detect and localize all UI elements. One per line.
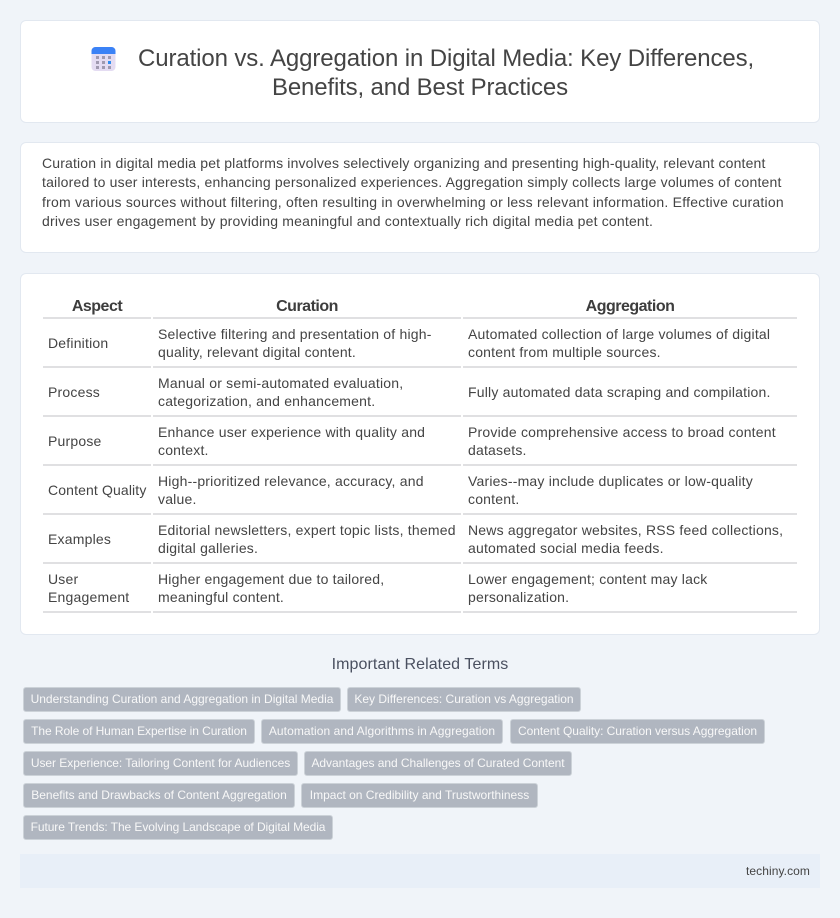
row: examples: automated social media feeds. bbox=[468, 540, 664, 556]
row: process: Fully automated data scraping and compilation. bbox=[468, 384, 771, 400]
intro text bbox=[42, 155, 784, 229]
row: definition bbox=[48, 326, 770, 360]
row: user engagement bbox=[48, 571, 708, 605]
title: Curation vs. Aggregation in Digital Media: Key Differences, bbox=[138, 45, 754, 72]
row: content quality: Varies--may include duplicates or low-quality bbox=[468, 473, 753, 489]
table header: Aggregation bbox=[586, 298, 674, 315]
row: purpose: context. bbox=[158, 442, 209, 458]
row: definition: Selective filtering and presentation of high- bbox=[158, 326, 432, 342]
row: purpose: Enhance user experience with quality and bbox=[158, 424, 425, 440]
title bbox=[138, 45, 754, 101]
related terms tags: Future Trends: The Evolving Landscape of Digital Media bbox=[31, 820, 325, 834]
related terms heading: Important Related Terms bbox=[332, 656, 508, 673]
header panel bbox=[20, 20, 820, 123]
title: Benefits, and Best Practices bbox=[272, 74, 568, 101]
related terms tags: Impact on Credibility and Trustworthiness bbox=[310, 788, 529, 802]
row: user engagement: User bbox=[48, 571, 78, 587]
footer bbox=[20, 854, 820, 888]
row: user engagement: Engagement bbox=[48, 589, 129, 605]
related terms tags: Understanding Curation and Aggregation in Digital Media bbox=[31, 692, 333, 706]
row: user engagement: meaningful content. bbox=[158, 589, 284, 605]
row: content quality: value. bbox=[158, 491, 197, 507]
row: examples: Editorial newsletters, expert topic lists, themed bbox=[158, 522, 456, 538]
row: examples: Examples bbox=[48, 531, 111, 547]
row: process: Manual or semi-automated evaluation, bbox=[158, 375, 403, 391]
row: definition: quality, relevant digital content. bbox=[158, 344, 356, 360]
row: process: categorization, and enhancement. bbox=[158, 393, 375, 409]
table header bbox=[72, 298, 674, 315]
footer credit: techiny.com bbox=[746, 864, 810, 878]
table header: Aspect bbox=[72, 298, 122, 315]
row: definition: Automated collection of large volumes of digital bbox=[468, 326, 770, 342]
row: purpose: Purpose bbox=[48, 433, 102, 449]
row: purpose bbox=[48, 424, 776, 458]
related terms tags: Benefits and Drawbacks of Content Aggregation bbox=[31, 788, 287, 802]
row: examples: digital galleries. bbox=[158, 540, 258, 556]
intro text: drives user engagement by providing meaningful and contextually rich digital media pet content. bbox=[42, 213, 653, 229]
intro panel bbox=[20, 142, 820, 253]
row: examples bbox=[48, 522, 783, 556]
related terms tags: User Experience: Tailoring Content for Audiences bbox=[31, 756, 290, 770]
row: definition: Definition bbox=[48, 335, 108, 351]
row: process: Process bbox=[48, 384, 100, 400]
icon: calendar bbox=[92, 47, 116, 71]
row: examples: News aggregator websites, RSS feed collections, bbox=[468, 522, 783, 538]
intro text: from various sources without filtering, often resulting in overwhelming or less relevant information. Effective curation bbox=[42, 194, 784, 210]
related terms tags bbox=[23, 687, 765, 840]
row: user engagement: Higher engagement due to tailored, bbox=[158, 571, 384, 587]
row: purpose: datasets. bbox=[468, 442, 527, 458]
related terms tags: The Role of Human Expertise in Curation bbox=[31, 724, 247, 738]
intro text: Curation in digital media pet platforms involves selectively organizing and presenting high-quality, relevant content bbox=[42, 155, 766, 171]
row: content quality bbox=[48, 473, 753, 507]
related terms tags: Automation and Algorithms in Aggregation bbox=[269, 724, 495, 738]
intro text: tailored to user interests, enhancing personalized experiences. Aggregation simply collects large volumes of content bbox=[42, 174, 782, 190]
row: definition: content from multiple sources. bbox=[468, 344, 661, 360]
comparison table panel bbox=[20, 273, 820, 635]
row: content quality: High--prioritized relevance, accuracy, and bbox=[158, 473, 424, 489]
related terms tags: Advantages and Challenges of Curated Content bbox=[311, 756, 565, 770]
row: user engagement: Lower engagement; content may lack bbox=[468, 571, 708, 587]
row: purpose: Provide comprehensive access to broad content bbox=[468, 424, 776, 440]
related terms tags: Content Quality: Curation versus Aggregation bbox=[518, 724, 757, 738]
related terms tags: Key Differences: Curation vs Aggregation bbox=[354, 692, 574, 706]
row: user engagement: personalization. bbox=[468, 589, 569, 605]
row: content quality: content. bbox=[468, 491, 519, 507]
row: content quality: Content Quality bbox=[48, 482, 146, 498]
table header: Curation bbox=[276, 298, 338, 315]
row: process bbox=[48, 375, 771, 409]
